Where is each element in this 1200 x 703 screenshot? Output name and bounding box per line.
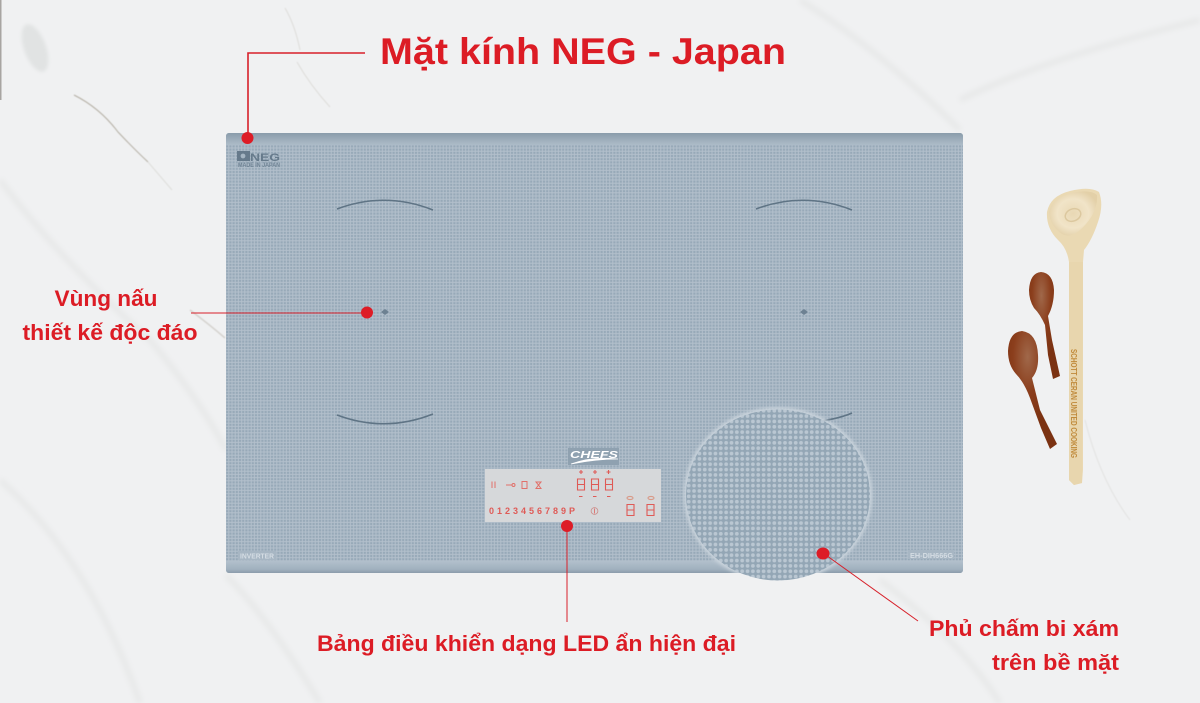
panel: induction cooktop [226, 133, 963, 573]
power key [591, 508, 598, 514]
NEG logo [237, 151, 280, 169]
seven segment displays [578, 470, 654, 516]
magnified dot pattern lens [684, 408, 872, 582]
icon: large wooden spoon [1047, 189, 1101, 485]
CHEFS logo: CHEFS [570, 449, 618, 461]
heading: Mặt kính NEG - Japan [380, 31, 786, 72]
icon: small wooden spoon lower [1008, 331, 1057, 449]
bottom glass edge [226, 561, 963, 573]
spoon engraving: SCHOTT CERAN UNITED COOKING [1069, 349, 1078, 458]
icon: small wooden spoon upper [1029, 272, 1060, 379]
model badge: EH-DIH666G [910, 551, 953, 560]
callout: cooking zone: Vùng nấu [54, 286, 158, 311]
zone centre marks [381, 309, 808, 315]
callout: grey dot coating [816, 548, 1120, 675]
callout: cooking zone [22, 286, 373, 345]
top glass edge [226, 133, 963, 145]
callout: LED control [317, 520, 736, 656]
function icons [492, 482, 541, 488]
NEG logo: NEG [250, 152, 280, 164]
NEG logo: MADE IN JAPAN [238, 163, 280, 169]
callout: grey dot coating: Phủ chấm bi xám [929, 616, 1119, 641]
CHEFS logo [568, 448, 619, 465]
callout: glass top [242, 31, 786, 144]
INVERTER badge: INVERTER [240, 552, 275, 560]
callout: LED control: Bảng điều khiển dạng LED ẩn hiện đại [317, 631, 736, 656]
digit row: 0123456789P [489, 506, 575, 516]
LED control panel [485, 469, 661, 522]
callout: cooking zone: thiết kế độc đáo [22, 320, 198, 345]
callout: grey dot coating: trên bề mặt [992, 650, 1120, 675]
cooking zone marks [337, 200, 852, 424]
